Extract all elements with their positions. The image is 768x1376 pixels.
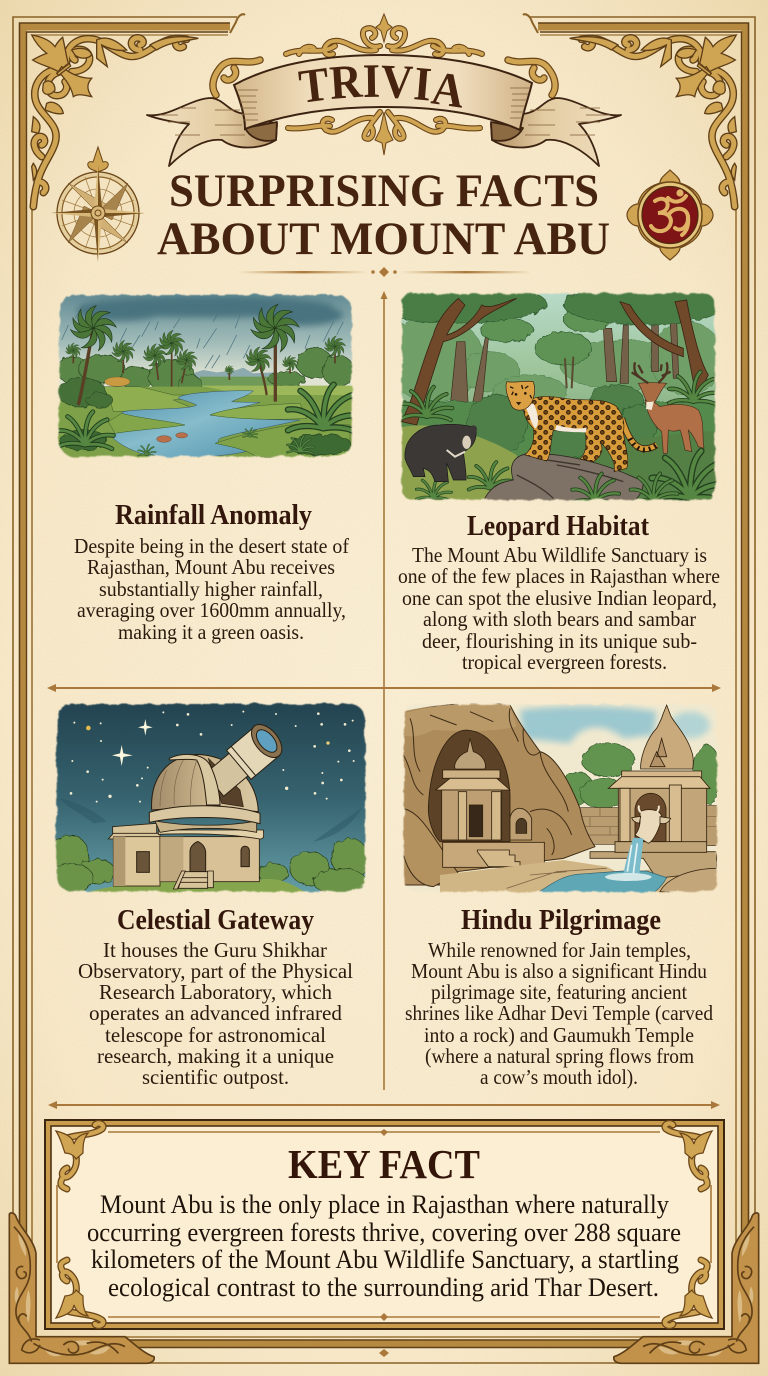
ribbon main band xyxy=(234,55,532,130)
leopard xyxy=(506,381,657,472)
body: leopard habitat: The Mount Abu Wildlife Sanctuary is xyxy=(412,543,707,567)
panel: celestial gateway xyxy=(47,698,373,1089)
telescope tube xyxy=(212,724,282,797)
body: key fact: ecological contrast to the surrounding arid Thar Desert. xyxy=(108,1273,659,1302)
adhar devi shrine xyxy=(436,738,544,867)
ribbon tails xyxy=(147,98,621,166)
key fact corner ornaments xyxy=(56,1123,712,1326)
body: rainfall anomaly: Despite being in the desert state of xyxy=(74,534,349,558)
panel: rainfall anomaly xyxy=(53,290,361,644)
arrow: vertical divider xyxy=(380,291,388,1090)
corner ornament: bottom right xyxy=(614,1213,759,1363)
body: key fact: kilometers of the Mount Abu Wildlife Sanctuary, a startling xyxy=(91,1245,679,1274)
body: celestial gateway: scientific outpost. xyxy=(142,1065,289,1089)
dome xyxy=(152,754,258,812)
title: trivia: TRIVIA xyxy=(296,55,468,119)
body: key fact: Mount Abu is the only place in Rajasthan where naturally xyxy=(100,1190,669,1219)
body: rainfall anomaly xyxy=(74,534,349,644)
body: celestial gateway: operates an advanced infrared xyxy=(89,1001,342,1025)
heading: celestial gateway: Celestial Gateway xyxy=(117,905,314,936)
body: celestial gateway: Research Laboratory, which xyxy=(99,980,332,1004)
icon: om badge xyxy=(627,170,713,260)
body: celestial gateway: research, making it a unique xyxy=(97,1044,334,1068)
body: celestial gateway: telescope for astronomical xyxy=(105,1023,326,1047)
body: hindu pilgrimage: a cow’s mouth idol). xyxy=(480,1065,638,1089)
body: key fact xyxy=(87,1190,681,1302)
panel: hindu pilgrimage xyxy=(397,698,727,1089)
body: leopard habitat: along with sloth bears and sambar xyxy=(423,607,696,631)
steps xyxy=(173,871,213,889)
om symbol xyxy=(651,191,688,235)
building drum xyxy=(160,837,259,882)
body: hindu pilgrimage: into a rock) and Gaumukh Temple xyxy=(424,1023,694,1047)
heading: hindu pilgrimage: Hindu Pilgrimage xyxy=(461,905,661,936)
sambar deer xyxy=(632,362,704,453)
top flourish xyxy=(286,14,482,55)
panel: leopard habitat xyxy=(398,291,720,674)
body: rainfall anomaly: Rajasthan, Mount Abu receives xyxy=(87,555,335,579)
bottom flourish xyxy=(288,112,480,155)
body: leopard habitat: one of the few places in Rajasthan where xyxy=(398,564,720,588)
body: hindu pilgrimage: pilgrimage site, featuring ancient xyxy=(431,980,687,1004)
body: rainfall anomaly: substantially higher rainfall, xyxy=(99,577,323,601)
arrow: horizontal divider lower xyxy=(48,1101,720,1109)
body: hindu pilgrimage xyxy=(405,938,713,1089)
body: hindu pilgrimage: Mount Abu is also a significant Hindu xyxy=(411,959,707,983)
body: key fact: occurring evergreen forests thrive, covering over 288 square xyxy=(87,1218,681,1247)
rock xyxy=(483,453,643,502)
illustration: forest with leopard, bear and deer xyxy=(400,291,717,502)
trivia ribbon banner xyxy=(147,14,621,166)
panel: key fact xyxy=(45,1120,724,1329)
body: hindu pilgrimage: (where a natural spring flows from xyxy=(425,1044,694,1068)
corner ornament: bottom left xyxy=(9,1213,154,1363)
body: celestial gateway: Observatory, part of the Physical xyxy=(78,959,353,983)
heading: key fact: KEY FACT xyxy=(288,1141,480,1187)
body: leopard habitat: tropical evergreen forests. xyxy=(462,650,667,674)
heading: surprising facts about mount abu: ABOUT MOUNT ABU xyxy=(157,213,610,265)
arrow: horizontal divider upper xyxy=(47,684,721,692)
side flourishes xyxy=(213,60,555,95)
body: celestial gateway xyxy=(78,938,353,1089)
body: rainfall anomaly: making it a green oasis. xyxy=(118,620,304,644)
gaumukh shrine xyxy=(608,705,710,852)
ground xyxy=(440,860,676,894)
heading: rainfall anomaly: Rainfall Anomaly xyxy=(115,500,312,531)
corner ornament: top left xyxy=(32,35,198,207)
body: leopard habitat xyxy=(398,543,720,674)
cow head idol xyxy=(632,806,671,843)
body: leopard habitat: one can spot the elusive Indian leopard, xyxy=(402,586,717,610)
illustration: rock shrine and gaumukh spring xyxy=(397,698,727,895)
body: hindu pilgrimage: While renowned for Jain temples, xyxy=(428,938,691,962)
body: leopard habitat: deer, flourishing in its unique sub- xyxy=(422,629,697,653)
heading: surprising facts about mount abu xyxy=(157,165,610,265)
rock mass xyxy=(397,703,595,885)
ribbon hatching xyxy=(160,88,610,135)
body: celestial gateway: It houses the Guru Shikhar xyxy=(103,938,327,962)
corner ornament: top right xyxy=(570,35,736,207)
sloth bear xyxy=(405,424,477,482)
illustration: observatory under stars xyxy=(47,698,373,898)
building wing xyxy=(113,823,157,835)
heading: surprising facts about mount abu: SURPRISING FACTS xyxy=(169,165,599,217)
heading: leopard habitat: Leopard Habitat xyxy=(467,511,650,542)
bottom centre diamond xyxy=(379,1349,389,1357)
water xyxy=(537,871,667,895)
body: rainfall anomaly: averaging over 1600mm annually, xyxy=(77,598,346,622)
illustration: rainy river landscape xyxy=(53,290,361,465)
body: hindu pilgrimage: shrines like Adhar Devi Temple (carved xyxy=(405,1001,713,1025)
icon: compass rose xyxy=(51,147,145,262)
title divider xyxy=(238,267,532,277)
